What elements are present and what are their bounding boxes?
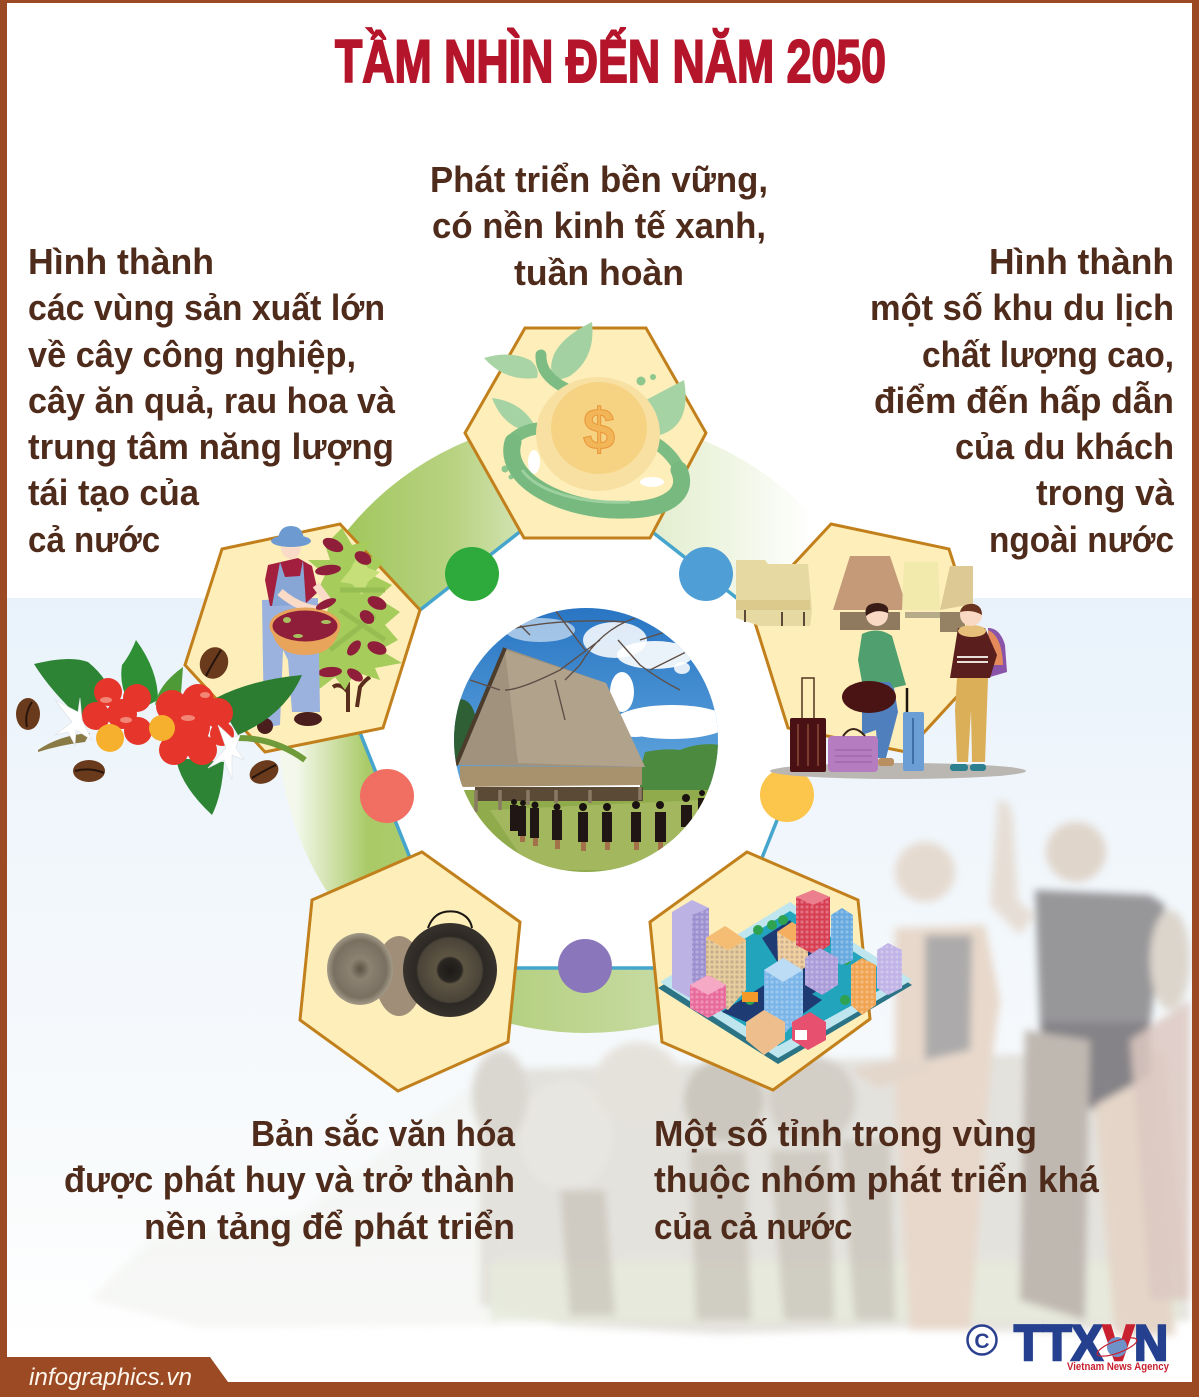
farmer legs: [262, 598, 320, 728]
green ring segment top right: [655, 440, 788, 595]
stilts: [476, 787, 640, 812]
shoes: [257, 718, 273, 734]
hexagon: gongs culture: [300, 852, 520, 1091]
head: [281, 535, 301, 559]
ground shadow: [770, 763, 1026, 779]
clouds: [505, 618, 730, 739]
small block door: [795, 1030, 807, 1040]
red berries: [314, 535, 389, 684]
text block: sustainable development: Phát triển bền vững,: [430, 159, 768, 200]
text block: production regions: các vùng sản xuất lớn: [28, 287, 385, 328]
icon: farmer harvesting coffee: [257, 526, 402, 734]
hexagon: city development: [650, 852, 870, 1090]
ring and inner pentagon: [279, 440, 790, 1033]
right-edge figure with striped cloth: [1130, 1000, 1190, 1300]
trunk: [333, 677, 370, 712]
orange tower right: [851, 958, 876, 1015]
arms: [280, 585, 330, 610]
small dots: [636, 376, 646, 386]
red tower: [796, 890, 830, 955]
green ring segment bottom: [279, 735, 659, 1033]
head: [960, 604, 982, 626]
ripe yellow berries: [96, 724, 124, 752]
stem: [238, 738, 305, 760]
icon: bronze gongs: [327, 911, 497, 1017]
trees: [640, 744, 725, 800]
connector dots: [360, 547, 814, 993]
text block: sustainable development: có nền kinh tế xanh,: [432, 205, 766, 246]
purple block: [805, 948, 838, 995]
hat: [271, 535, 311, 547]
trousers: [955, 678, 988, 762]
small beige block: [746, 1010, 785, 1055]
shoes: [950, 764, 968, 771]
title: TẦM NHÌN ĐẾN NĂM 2050: [335, 28, 886, 95]
text block: tourism areas: ngoài nước: [989, 519, 1174, 560]
text block: tourism areas: Hình thành: [989, 241, 1174, 282]
dot: yellow: [760, 768, 814, 822]
leaves: [34, 659, 112, 718]
dancers clothing: [510, 798, 705, 842]
dancers: [510, 790, 705, 851]
yellow house: [902, 562, 940, 610]
logo: TTXVN Vietnam News Agency: [968, 1315, 1170, 1373]
backpack: [988, 628, 1007, 677]
centre photo: communal long house: [450, 605, 730, 875]
hexagon: coffee agriculture: [185, 524, 420, 752]
left dancer: [895, 842, 955, 902]
dot: blue: [679, 547, 733, 601]
shirt: [265, 558, 318, 606]
text block: cultural identity: nền tảng để phát triển: [144, 1206, 515, 1247]
text block: production regions: về cây công nghiệp,: [28, 334, 356, 375]
shoes: [878, 758, 894, 766]
dancers heads: [511, 790, 705, 811]
left gong: [327, 933, 393, 1005]
crowd legs: [560, 1140, 895, 1320]
handful of berries: [314, 596, 338, 612]
coffee tree: [308, 528, 402, 712]
text block: provinces development: của cả nước: [654, 1208, 852, 1247]
collar: [958, 625, 986, 637]
text block: tourism areas: một số khu du lịch: [870, 287, 1174, 328]
copyright mark: C: [974, 1330, 990, 1353]
agency wordmark: TTXVN: [1014, 1315, 1168, 1371]
text block: tourism areas: chất lượng cao,: [922, 334, 1174, 375]
hexagon: sustainable economy: [465, 328, 706, 538]
text block: production regions: cả nước: [28, 521, 160, 560]
beige tower: [706, 926, 746, 1010]
dot: purple: [558, 939, 612, 993]
text block: production regions: cây ăn quả, rau hoa và: [28, 380, 396, 421]
thatch roof: [456, 648, 645, 767]
ground: [464, 790, 708, 872]
dancers legs: [520, 836, 663, 851]
overalls bib: [272, 560, 306, 606]
pale sky background: [7, 598, 1192, 1358]
gongs: [520, 1081, 612, 1189]
central blue tower: [764, 958, 803, 1035]
right dancer: [1046, 822, 1106, 882]
lilac tower right: [877, 943, 902, 995]
ring back: [512, 428, 680, 470]
text block: production regions: Hình thành: [28, 241, 214, 282]
berries: [82, 678, 234, 765]
ground and crowd band: [480, 1050, 1190, 1334]
truck: [742, 992, 758, 1002]
green ring segment top left: [348, 440, 518, 735]
text block: cultural identity: Bản sắc văn hóa: [251, 1112, 516, 1154]
bean grooves: [26, 650, 276, 778]
roads: [722, 975, 822, 1034]
faded background photo: festival dancers: [90, 800, 1190, 1335]
text block: provinces development: Một số tỉnh trong vùng: [654, 1113, 1037, 1154]
text block: production regions: trung tâm năng lượng: [28, 426, 394, 467]
text block: production regions: tái tạo của: [28, 472, 200, 513]
text block: sustainable development: tuần hoàn: [514, 252, 684, 293]
purple bag: [828, 729, 878, 772]
dollar sign: $: [583, 397, 615, 462]
house wall: [460, 766, 642, 787]
sky: [450, 605, 725, 785]
text block: provinces development: thuộc nhóm phát triển khá: [654, 1159, 1100, 1200]
brown house: [833, 556, 908, 610]
dark red suitcase: [790, 678, 826, 772]
agency name: Vietnam News Agency: [1067, 1361, 1170, 1373]
small pink block: [792, 1012, 826, 1050]
hexagon: tourism: [751, 524, 986, 752]
stilt houses: [736, 556, 973, 632]
base top: [660, 902, 912, 1058]
text block: tourism areas: điểm đến hấp dẫn: [874, 380, 1174, 421]
icon: coffee branch with berries: [16, 640, 305, 815]
ring gaps: [528, 450, 540, 474]
leaves and stem: [484, 354, 538, 379]
white flowers: [55, 698, 244, 780]
white pentagon with blue outline: [337, 480, 835, 968]
coffee beans: [16, 643, 282, 788]
dark foliage accents: [330, 590, 385, 650]
sweater: [950, 628, 997, 678]
gong string: [428, 911, 472, 928]
text block: provinces development: [654, 1113, 1100, 1247]
front gong: [403, 923, 497, 1017]
green ring front: [512, 442, 682, 510]
text block: cultural identity: được phát huy và trở thành: [64, 1159, 515, 1200]
light foliage: [340, 555, 380, 595]
backpack traveller: [950, 604, 1007, 771]
orange block: [777, 922, 808, 975]
base edge: [658, 907, 912, 1064]
foliage: [308, 528, 402, 690]
bare branches: [470, 610, 690, 720]
blue tower: [831, 908, 853, 965]
text block: tourism areas: của du khách: [955, 426, 1174, 467]
text block: tourism areas: trong và: [1036, 472, 1175, 513]
back gong: [375, 936, 423, 1016]
tan house: [940, 566, 973, 610]
text block: production regions: [28, 241, 405, 560]
jeans: [862, 682, 898, 758]
coin: [536, 377, 660, 491]
icon: isometric city: [658, 890, 912, 1064]
blue suitcase: [903, 688, 924, 771]
pink block: [690, 975, 726, 1018]
trees: [745, 915, 851, 1005]
copyright mark: [968, 1326, 996, 1354]
icon: coin with green sprout: [484, 322, 686, 510]
shoulder bag: [842, 681, 896, 713]
dot: red: [360, 769, 414, 823]
faint left crowd: [90, 1080, 500, 1328]
icon: tourists with luggage and stilt houses: [736, 556, 1026, 779]
grass strip: [490, 1262, 1180, 1322]
dot: green: [445, 547, 499, 601]
lilac tower: [672, 900, 709, 998]
berry highlights: [100, 692, 210, 723]
sweater: [858, 630, 906, 688]
footer brand: infographics.vn: infographics.vn: [29, 1364, 192, 1391]
basket: [271, 622, 340, 655]
pale house left: [736, 560, 812, 626]
globe emblem: [1095, 1334, 1139, 1360]
head: [866, 604, 888, 626]
green-sweater traveller: [842, 603, 906, 766]
